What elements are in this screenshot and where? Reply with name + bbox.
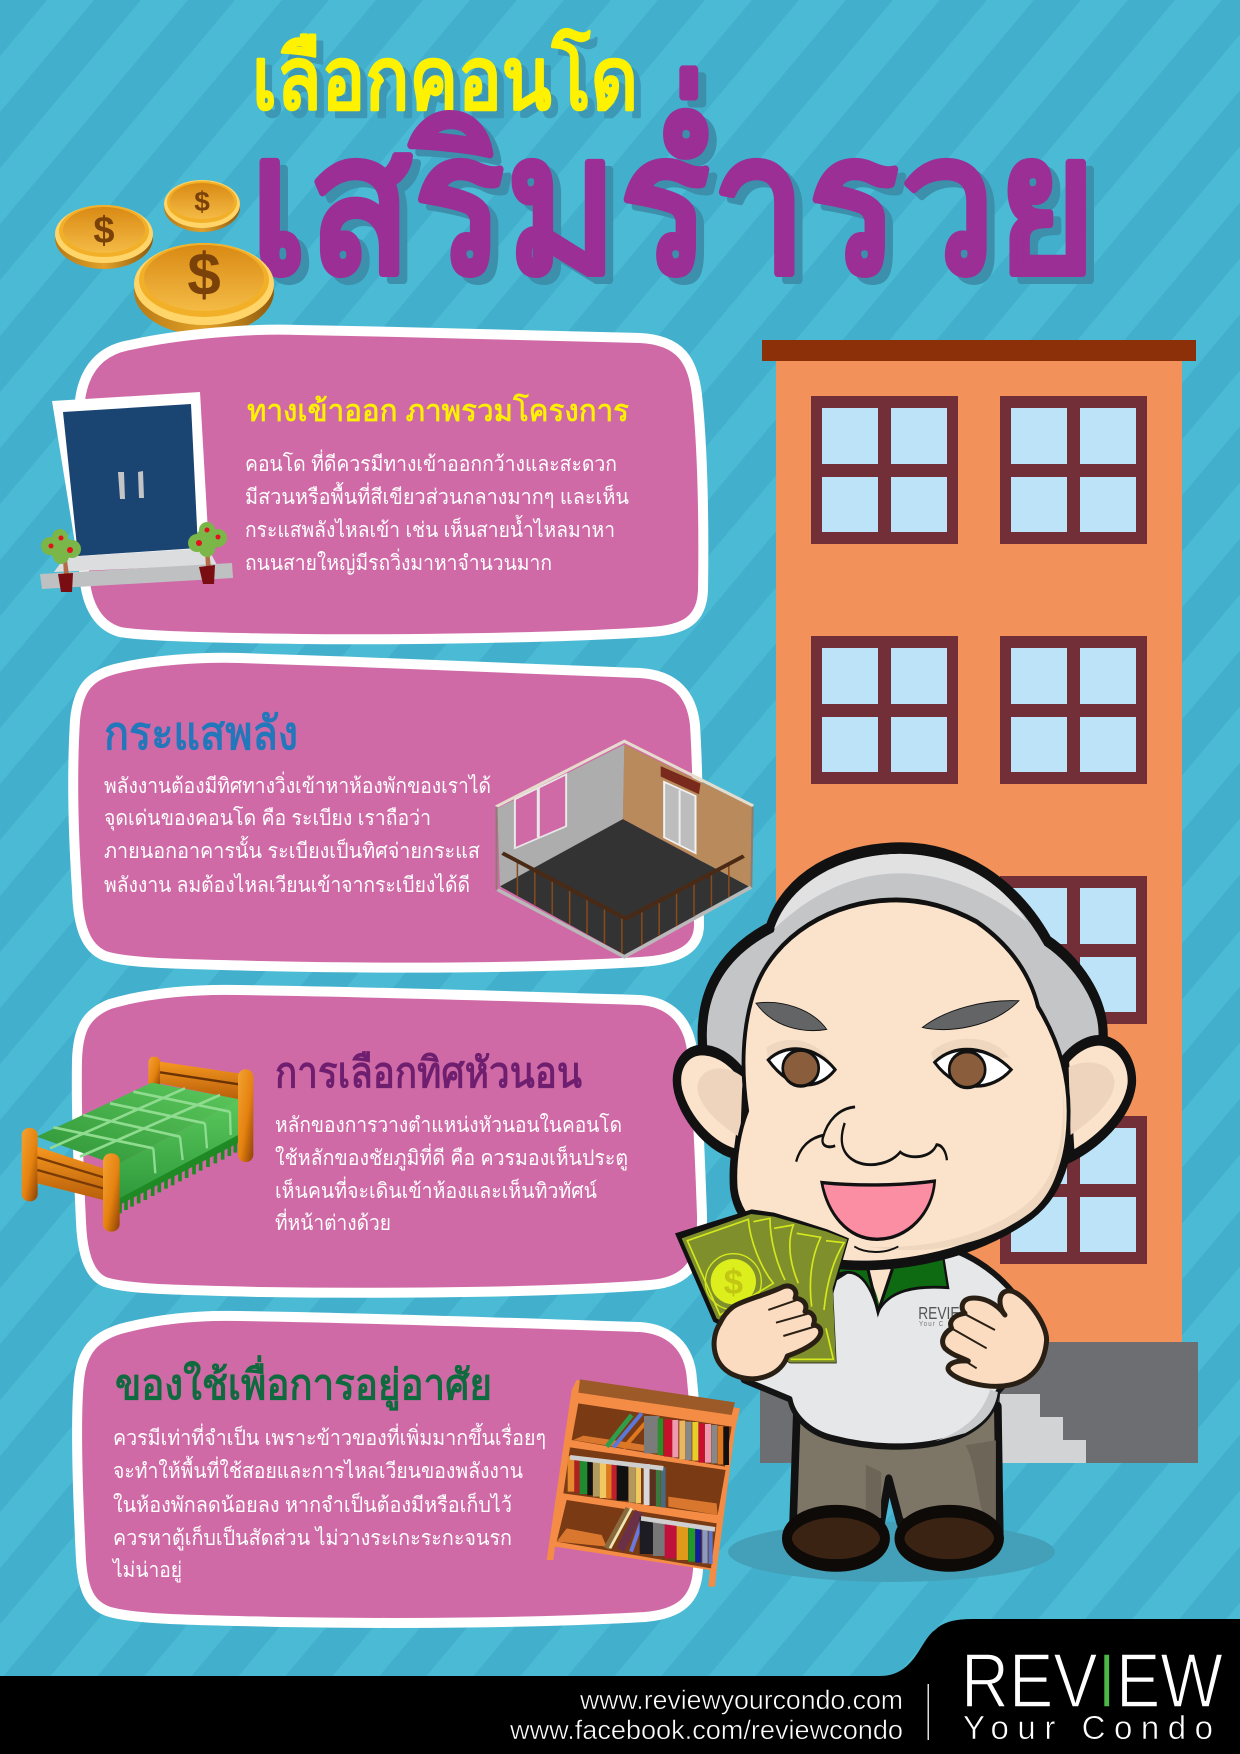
panel: bed direction: [22, 990, 702, 1293]
body text: ใช้หลักของชัยภูมิที่ดี คือ ควรมองเห็นประตู: [275, 1143, 628, 1171]
icon: bed: [22, 1057, 253, 1232]
windows: [811, 396, 1147, 1264]
roof: [762, 340, 1196, 361]
icon: door: [40, 392, 233, 592]
ears: [677, 1040, 1132, 1157]
face: [735, 900, 1069, 1263]
coin small: [164, 180, 240, 232]
head: [677, 848, 1132, 1263]
body text: คอนโด ที่ดีควรมีทางเข้าออกกว้างและสะดวก: [245, 449, 617, 476]
body text: ที่หน้าต่างด้วย: [275, 1208, 391, 1235]
shoes: [787, 1511, 999, 1565]
title line 2: เสริมร่ำรวย: [249, 69, 1097, 315]
legs: [793, 1406, 1000, 1533]
right hand: [943, 1291, 1047, 1386]
title line 2: เสริมร่ำรวย: [257, 76, 1105, 322]
logo: Your Condo: [963, 1709, 1213, 1746]
plant left: [41, 529, 81, 592]
shirt logo: Your C: [919, 1320, 944, 1328]
footer bar: [0, 1619, 1240, 1754]
plant right: [188, 522, 227, 584]
body text: ภายนอกอาคารนั้น ระเบียงเป็นทิศจ่ายกระแส: [104, 836, 480, 863]
icon: room: [496, 741, 753, 957]
body text: ในห้องพักลดน้อยลง หากจำเป็นต้องมีหรือเก็บไว้: [113, 1491, 512, 1517]
body text: จุดเด่นของคอนโด คือ ระเบียง เราถือว่า: [104, 806, 431, 831]
logo: REVIEW: [961, 1638, 1223, 1724]
body text: มีสวนหรือพื้นที่สีเขียวส่วนกลางมากๆ และเห็น: [245, 482, 629, 509]
body text: หลักของการวางตำแหน่งหัวนอนในคอนโด: [275, 1113, 622, 1137]
body text: พลังงาน ลมต้องไหลเวียนเข้าจากระเบียงได้ดี: [104, 873, 470, 897]
footer links: www.facebook.com/reviewcondo: [509, 1715, 903, 1745]
footer links: [509, 1685, 903, 1745]
eyes: [766, 1039, 1011, 1088]
body text: ไม่น่าอยู่: [111, 1558, 182, 1583]
body text: จะทำให้พื้นที่ใช้สอยและการไหลเวียนของพลังงาน: [113, 1456, 523, 1483]
nose and cheeks: [796, 1107, 947, 1165]
body text: [275, 1113, 628, 1235]
body text: [104, 771, 491, 897]
body text: กระแสพลังไหลเข้า เช่น เห็นสายน้ำไหลมาหา: [245, 515, 615, 542]
body text: เห็นคนที่จะเดินเข้าห้องและเห็นทิวทัศน์: [275, 1176, 597, 1203]
footer links: www.reviewyourcondo.com: [579, 1685, 903, 1715]
title line 1: เลือกคอนโด: [259, 36, 645, 135]
panel: energy flow: [73, 658, 753, 968]
hair: [702, 848, 1103, 1091]
base and stairs: [760, 1342, 1198, 1463]
heading: ทางเข้าออก ภาพรวมโครงการ: [247, 393, 629, 428]
panel: entrance: [40, 330, 703, 639]
shirt: [720, 1251, 1042, 1447]
heading: ของใช้เพื่อการอยู่อาศัย: [115, 1356, 492, 1410]
coin large: $: [187, 241, 221, 308]
body text: [111, 1423, 546, 1583]
building: [760, 340, 1198, 1463]
body text: [245, 449, 629, 575]
floor shadow: [728, 1522, 1055, 1582]
coin small: $: [194, 186, 210, 217]
icon: coins: [55, 180, 274, 335]
body text: ควรมีเท่าที่จำเป็น เพราะข้าวของที่เพิ่มมากขึ้นเรื่อยๆ: [113, 1423, 546, 1450]
icon: banknotes: [675, 1209, 849, 1363]
icon: bookshelf: [547, 1379, 740, 1587]
body text: ถนนสายใหญ่มีรถวิ่งมาหาจำนวนมาก: [245, 548, 552, 575]
title line 1: เลือกคอนโด: [252, 29, 638, 128]
title: [249, 29, 1105, 322]
heading: กระแสพลัง: [104, 707, 298, 759]
coin large: [134, 241, 274, 335]
heading: การเลือกทิศหัวนอน: [275, 1049, 582, 1096]
body text: พลังงานต้องมีทิศทางวิ่งเข้าหาห้องพักของเราได้: [104, 771, 491, 798]
icon: banknotes: $: [724, 1263, 743, 1302]
coin medium: $: [93, 210, 115, 252]
mouth: [822, 1181, 935, 1239]
eyebrows: [756, 1001, 1019, 1031]
coin medium: [55, 205, 153, 269]
character: man with money: [675, 848, 1132, 1582]
building body: [776, 361, 1182, 1342]
footer divider: [928, 1684, 929, 1740]
body text: ควรหาตู้เก็บเป็นสัดส่วน ไม่วางระเกะระกะจนรก: [113, 1524, 512, 1551]
left hand: [714, 1286, 821, 1379]
collar: [831, 1251, 948, 1312]
shirt logo: REVIE: [918, 1305, 960, 1324]
panel: belongings: [77, 1316, 699, 1623]
